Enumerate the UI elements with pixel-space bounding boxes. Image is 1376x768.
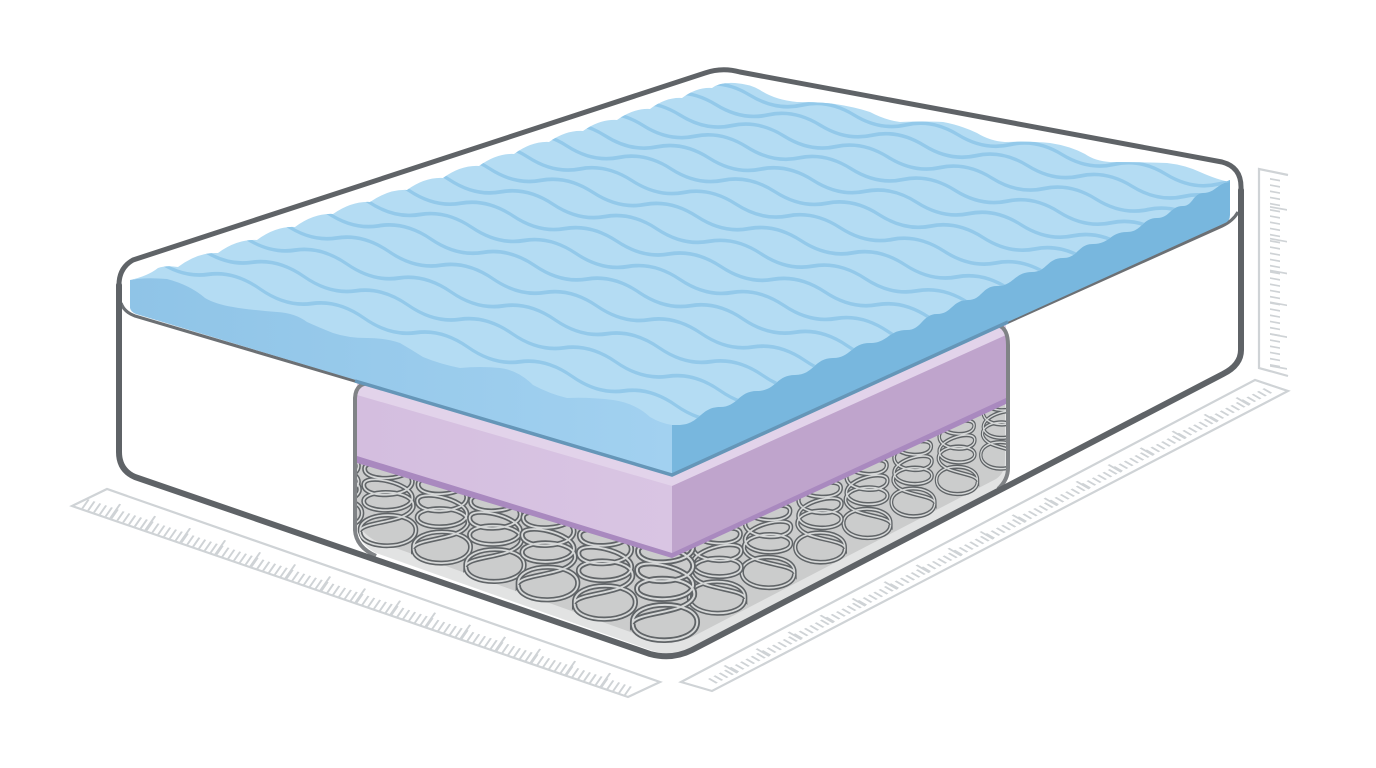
right side ruler	[1259, 169, 1288, 376]
body seam line	[121, 212, 1238, 386]
purple comfort layer	[357, 322, 1006, 558]
foam wave lines	[164, 83, 1228, 418]
cutaway outline	[355, 326, 1008, 556]
bottom right ruler	[681, 380, 1288, 691]
mattress body	[119, 70, 1241, 656]
cutaway floor	[357, 325, 1006, 654]
mattress outer outline	[119, 70, 1241, 656]
blue wavy foam top layer	[130, 82, 1230, 477]
left ruler	[72, 489, 660, 697]
illustration: mattress cutaway	[69, 67, 1290, 698]
springs	[308, 397, 1019, 640]
